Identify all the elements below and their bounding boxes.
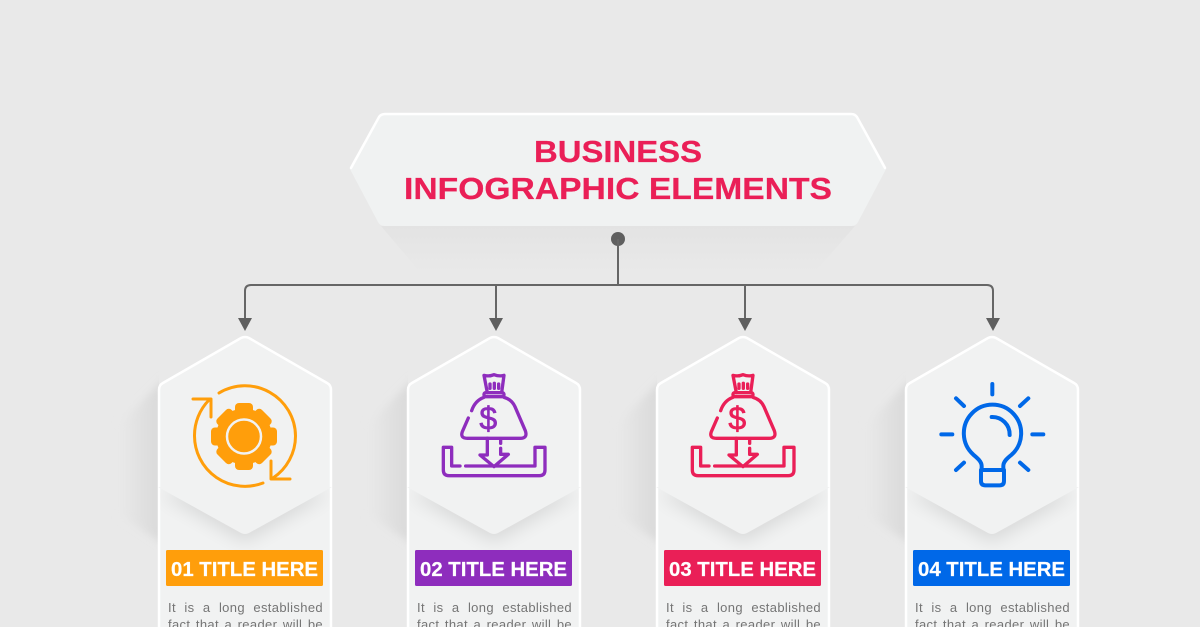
- panel: card 01: [120, 336, 332, 627]
- text block: 01: [168, 599, 323, 627]
- label: 04 title: [913, 550, 1070, 586]
- connector tree with arrows: [238, 232, 1000, 331]
- panel: card 03: [618, 336, 830, 627]
- text block: 02: It is a long established: [417, 600, 572, 615]
- label: 03 title: [664, 550, 821, 586]
- text block: 03: It is a long established: [666, 600, 821, 615]
- title text: BUSINESS: [534, 134, 702, 169]
- icon: light bulb: [941, 384, 1043, 485]
- icon: gear with rotating arrows: [193, 386, 296, 486]
- icon: money bag into tray: $: [479, 400, 497, 436]
- icon: money bag into tray: [692, 375, 794, 476]
- text block: 02: [417, 599, 572, 627]
- panel: card 02: [369, 336, 581, 627]
- title banner: [350, 113, 886, 272]
- text block: 04: [915, 599, 1070, 627]
- label: 01 title: [166, 550, 323, 586]
- label: 01 title: 01 TITLE HERE: [171, 559, 318, 581]
- label: 03 title: 03 TITLE HERE: [669, 559, 816, 581]
- icon: money bag into tray: [443, 375, 545, 476]
- label: 04 title: 04 TITLE HERE: [918, 559, 1065, 581]
- label: 02 title: [415, 550, 572, 586]
- text block: 04: It is a long established: [915, 600, 1070, 615]
- title text: INFOGRAPHIC ELEMENTS: [404, 171, 832, 206]
- label: 02 title: 02 TITLE HERE: [420, 559, 567, 581]
- icon: money bag into tray: $: [728, 400, 746, 436]
- panel: card 04: [867, 336, 1079, 627]
- text block: 03: [666, 599, 821, 627]
- text block: 01: It is a long established: [168, 600, 323, 615]
